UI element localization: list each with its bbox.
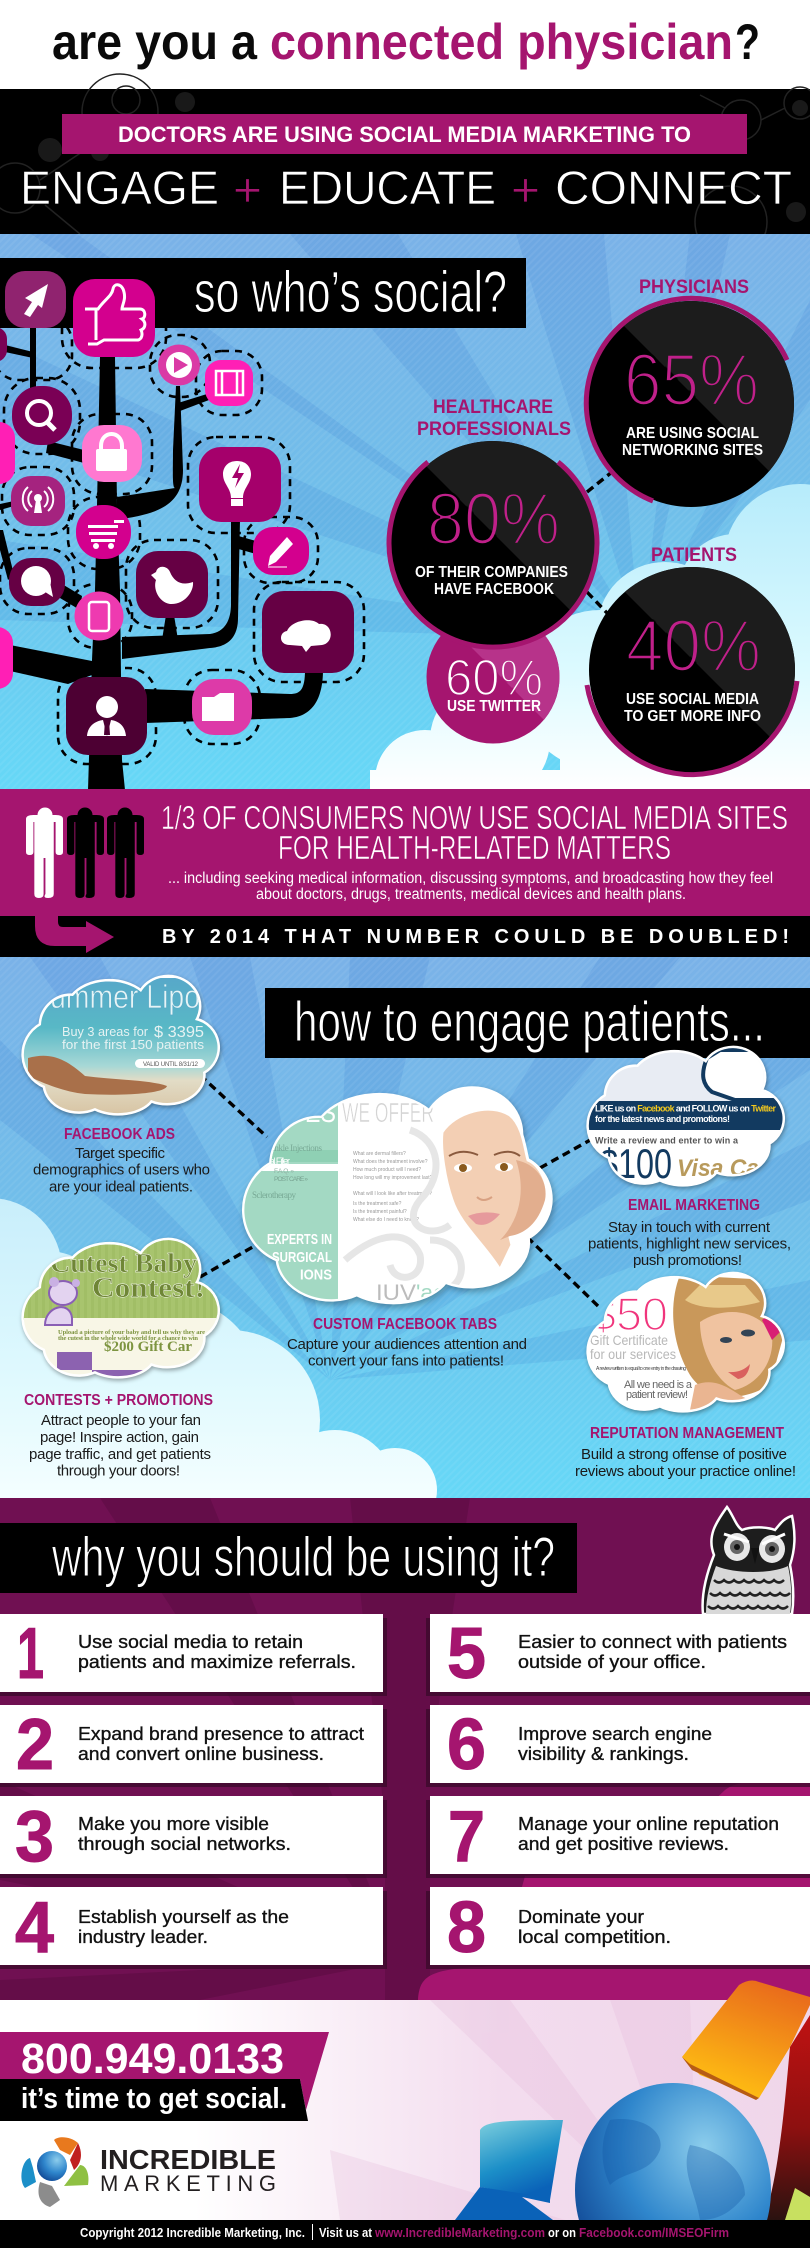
reason 4: Establish yourself as the (78, 1907, 289, 1927)
cloud image: beach ad: Buy 3 areas for (62, 1024, 149, 1039)
cloud image: email promo: LIKE us on Facebook and FOLLOW us on Twitter (595, 1104, 776, 1114)
icon: cursor (5, 271, 66, 328)
icon: pink stub top (0, 327, 7, 362)
reason 6: Improve search engine (518, 1724, 712, 1744)
stat: twitter 60%: 60% (445, 649, 543, 706)
custom facebook tabs: Capture your audiences attention and (287, 1336, 527, 1353)
reason 7: Manage your online reputation (518, 1814, 779, 1834)
owl illustration (703, 1507, 794, 1614)
cloud image: services page with face: What are dermal fillers? (353, 1151, 406, 1157)
cloud image: services page with face: What does the treatment involve? (353, 1159, 428, 1165)
arrow (35, 916, 114, 953)
contests and promotions: page traffic, and get patients (29, 1446, 211, 1463)
cloud image: services page with face: F.A.Q. » (274, 1168, 294, 1175)
title: ? (735, 14, 760, 70)
cloud image: beach ad: $ 3395 (154, 1024, 204, 1041)
cloud image: services page with face: 'ae (416, 1280, 446, 1305)
custom facebook tabs: CUSTOM FACEBOOK TABS (313, 1316, 497, 1333)
reason 7: 7 (448, 1797, 485, 1877)
icon: folder (192, 679, 252, 735)
supporting text: about doctors, drugs, treatments, medical devices and health plans. (256, 886, 686, 903)
stat: patients 40%: USE SOCIAL MEDIA (626, 691, 759, 708)
reason cards left column (0, 1614, 387, 1969)
engage educate connect: CONNECT (555, 162, 792, 215)
contests and promotions: Attract people to your fan (41, 1412, 201, 1429)
panel: one third of consumers (0, 789, 810, 916)
heading bar (0, 258, 526, 328)
logo mark (21, 2137, 88, 2207)
cloud image: services page with face: IONS (300, 1266, 332, 1284)
reason 2: 2 (16, 1705, 54, 1785)
contests and promotions: page! Inspire action, gain (40, 1429, 199, 1446)
cloud image: gift certificate with woman: $50 (590, 1288, 668, 1340)
stat: healthcare professionals 80%: 80% (427, 479, 560, 560)
cloud image: services page with face (240, 1089, 550, 1312)
reason 5: 5 (447, 1614, 486, 1694)
tree of social icons (0, 268, 364, 790)
heading bar (0, 1523, 577, 1593)
stat links (587, 472, 612, 613)
reason 1: Use social media to retain (78, 1632, 303, 1652)
icon: film (205, 360, 253, 406)
reason 8: Dominate your (518, 1907, 644, 1927)
cloud image: baby contest: the cutest in the whole wide world for a chance to win (58, 1335, 198, 1342)
reputation management (575, 1274, 796, 1480)
cloud image: services page with face: SURGICAL (272, 1249, 332, 1266)
icon: search (12, 386, 72, 445)
tree trunk and branches (0, 328, 323, 790)
supporting text (168, 870, 773, 903)
icon: play (158, 344, 200, 386)
panel: how to engage patients (0, 957, 810, 1550)
icon: pink stub low (0, 627, 13, 689)
icon: tablet (74, 592, 124, 640)
copyright footer (0, 2220, 810, 2248)
cloud image: beach ad: ummer Lipo (50, 978, 200, 1015)
cloud image: gift certificate with woman: Gift Certificate (590, 1332, 668, 1348)
cloud image: gift certificate with woman: patient review! (626, 1389, 688, 1401)
icon: pencil (253, 527, 309, 575)
reason 6: visibility & rankings. (518, 1744, 689, 1764)
copyright footer: or on (548, 2226, 576, 2240)
heading bar: so who’s social? (194, 260, 507, 325)
phone number banner (0, 2032, 329, 2110)
logo (21, 2137, 276, 2207)
cloud image: email promo: Write a review and enter to win a (595, 1136, 739, 1146)
cloud image: services page with face: How long will my improvement last? (353, 1175, 433, 1181)
stat: physicians 65%: ARE USING SOCIAL (626, 425, 759, 442)
engage educate connect: ENGAGE (20, 162, 219, 215)
cloud image: services page with face: Is the treatment painful? (353, 1209, 407, 1215)
callout: doubled by 2014 (0, 916, 810, 957)
cloud image: services page with face: What else do I need to know? (353, 1217, 419, 1223)
stat: physicians 65%: 65% (624, 340, 759, 421)
contests and promotions (20, 1240, 220, 1480)
phone number banner: 800.949.0133 (21, 2035, 284, 2083)
cloud image: baby contest: Upload a picture of your baby and tell us why they are (58, 1329, 205, 1336)
reputation management: reviews about your practice online! (575, 1463, 796, 1480)
engage educate connect: EDUCATE (279, 162, 496, 215)
clouds (0, 1198, 437, 1498)
face portrait (442, 1109, 547, 1270)
headline: FOR HEALTH-RELATED MATTERS (278, 830, 671, 867)
email marketing: push promotions! (633, 1252, 742, 1269)
cloud image: email promo (585, 1048, 785, 1190)
cloud image: gift certificate with woman: for our services (590, 1346, 676, 1362)
facebook ads: FACEBOOK ADS (64, 1126, 175, 1143)
reason 8 (430, 1887, 810, 1968)
custom facebook tabs: convert your fans into patients! (308, 1353, 504, 1370)
email marketing: EMAIL MARKETING (628, 1197, 760, 1214)
reason 3: through social networks. (78, 1834, 291, 1854)
cloud image: email promo: Visa Ca (677, 1155, 759, 1182)
stat: healthcare professionals 80%: HEALTHCARE (433, 396, 553, 418)
reason 8: local competition. (518, 1927, 671, 1947)
stat: patients 40%: PATIENTS (651, 544, 737, 566)
cloud image: services page with face: Dermal Filler (252, 1156, 290, 1166)
contests and promotions: through your doors! (57, 1462, 180, 1480)
stat: physicians 65% (584, 280, 794, 507)
cloud image: services page with face: Wrinkle Injections (262, 1143, 322, 1153)
icon: lock (82, 425, 142, 482)
cloud image: beach ad: VALID UNTIL 8/31/12 (143, 1062, 199, 1068)
copyright footer: Visit us at (319, 2226, 373, 2240)
cloud image: beach ad: for the first 150 patients (62, 1037, 205, 1052)
stat: healthcare professionals 80%: HAVE FACEBOOK (434, 581, 555, 598)
stat: healthcare professionals 80% (386, 400, 600, 650)
reason 5 (430, 1614, 810, 1694)
icon: person (66, 677, 147, 755)
cloud image: services page with face: What will I look like after treatment? (353, 1191, 432, 1197)
cloud image: services page with face: EXPERTS IN (267, 1231, 332, 1248)
reason 4: industry leader. (78, 1927, 208, 1947)
stat: physicians 65%: NETWORKING SITES (622, 442, 763, 459)
reason 2: and convert online business. (78, 1744, 324, 1764)
stat: twitter 60%: USE TWITTER (447, 698, 541, 715)
reason 3: Make you more visible (78, 1814, 269, 1834)
reason cards right column (426, 1614, 810, 1969)
stat: healthcare professionals 80%: OF THEIR COMPANIES (415, 564, 568, 581)
reason 4 (0, 1887, 383, 1968)
email marketing (585, 1048, 791, 1269)
cloud image: gift certificate with woman (585, 1274, 785, 1415)
copyright footer: Facebook.com/IMSEOFirm (579, 2226, 729, 2240)
reason 7: and get positive reviews. (518, 1834, 729, 1854)
engage educate connect: + (233, 164, 262, 217)
icon: wireless signal (11, 476, 65, 526)
logo: INCREDIBLE (100, 2144, 276, 2175)
facebook ads: demographics of users who (33, 1162, 210, 1178)
icon: thumbs up (73, 279, 155, 357)
logo: MARKETING (100, 2171, 276, 2196)
panel: intro banner (0, 74, 810, 258)
panel: why you should be using it (0, 1498, 810, 2000)
facebook ads: Target specific (75, 1145, 166, 1162)
email marketing: patients, highlight new services, (588, 1236, 791, 1253)
reason 3: 3 (15, 1797, 54, 1877)
reputation management: REPUTATION MANAGEMENT (590, 1425, 784, 1442)
reason 1: patients and maximize referrals. (78, 1652, 356, 1672)
reason 2: Expand brand presence to attract (78, 1724, 364, 1744)
stat: patients 40%: 40% (626, 606, 761, 687)
cloud image: services page with face: How much product will I need? (353, 1167, 421, 1173)
title: connected physician (270, 14, 733, 70)
copyright footer: Copyright 2012 Incredible Marketing, Inc. (80, 2226, 305, 2240)
cloud image: services page with face: Sclerotherapy (252, 1190, 296, 1200)
tagline banner (0, 2079, 308, 2121)
globe and ribbons illustration (455, 1981, 810, 2248)
icon: three people (26, 808, 144, 898)
reason 5: outside of your office. (518, 1652, 706, 1672)
icon: light bulb (199, 447, 281, 522)
banner strip (62, 114, 747, 154)
title: are you a (52, 14, 258, 70)
cloud image: baby contest (20, 1240, 220, 1383)
reason 6 (430, 1705, 810, 1785)
engage educate connect (20, 162, 792, 217)
cloud image: services page with face: IUV (376, 1280, 416, 1305)
cloud image: baby contest: Cutest Baby (50, 1248, 198, 1278)
reason 8: 8 (447, 1888, 486, 1968)
panel: so who's social (0, 234, 810, 789)
reason 6: 6 (447, 1705, 486, 1785)
cloud image: services page with face: CES (288, 1097, 336, 1128)
icon: shopping cart (76, 505, 131, 559)
cloud image: services page with face: WE OFFER (342, 1097, 434, 1128)
email marketing: Stay in touch with current (608, 1219, 771, 1236)
connector lines (200, 1075, 598, 1306)
reason 4: 4 (15, 1888, 54, 1968)
reason 1 (0, 1614, 383, 1694)
icon: cloud (262, 591, 354, 673)
cloud image: email promo: for the latest news and promotions! (595, 1114, 730, 1124)
callout: doubled by 2014: BY 2014 THAT NUMBER COULD BE DOUBLED! (162, 926, 789, 948)
facebook ads (20, 977, 220, 1196)
headline (161, 800, 788, 867)
icon: speech bubble (9, 558, 65, 606)
stat: physicians 65%: PHYSICIANS (639, 276, 749, 298)
stat: twitter 60% (426, 636, 560, 744)
contests and promotions: CONTESTS + PROMOTIONS (24, 1392, 213, 1409)
clouds (370, 484, 810, 830)
title (0, 0, 810, 89)
facebook ads: are your ideal patients. (49, 1178, 193, 1196)
panel: call to action footer (0, 1980, 810, 2220)
cloud image: gift certificate with woman: All we need is a (624, 1379, 693, 1391)
icon: bird (136, 551, 208, 618)
banner strip: DOCTORS ARE USING SOCIAL MEDIA MARKETING TO (118, 122, 691, 147)
heading bar: why you should be using it? (51, 1525, 555, 1588)
copyright footer: www.IncredibleMarketing.com (374, 2226, 545, 2240)
cloud image: services page with face: Is the treatment safe? (353, 1201, 402, 1207)
stat: patients 40% (584, 548, 800, 778)
cloud image: gift certificate with woman: A review written is equal to one entry in the drawing (596, 1366, 686, 1372)
reason 1: 1 (17, 1614, 44, 1694)
cloud image: services page with face: POST CARE » (274, 1176, 308, 1183)
supporting text: ... including seeking medical information, discussing symptoms, and broadcasting how they feel (168, 870, 773, 887)
icon: pink stub left (0, 422, 15, 484)
reason 3 (0, 1796, 383, 1877)
dashed icon halos (0, 268, 364, 764)
cloud image: baby contest: Contest! (92, 1272, 205, 1304)
engage educate connect: + (511, 164, 540, 217)
reason 5: Easier to connect with patients (518, 1632, 787, 1652)
reason 7 (430, 1796, 810, 1877)
cloud image: email promo: $100 (600, 1140, 672, 1187)
reason 2 (0, 1705, 383, 1785)
cloud image: beach ad (20, 977, 220, 1120)
stat: patients 40%: TO GET MORE INFO (624, 708, 761, 725)
stat: healthcare professionals 80%: PROFESSIONALS (417, 418, 571, 440)
cloud image: baby contest: $200 Gift Car (104, 1339, 192, 1355)
tagline banner: it’s time to get social. (21, 2083, 287, 2115)
reputation management: Build a strong offense of positive (581, 1446, 787, 1463)
custom facebook tabs (240, 1089, 550, 1370)
